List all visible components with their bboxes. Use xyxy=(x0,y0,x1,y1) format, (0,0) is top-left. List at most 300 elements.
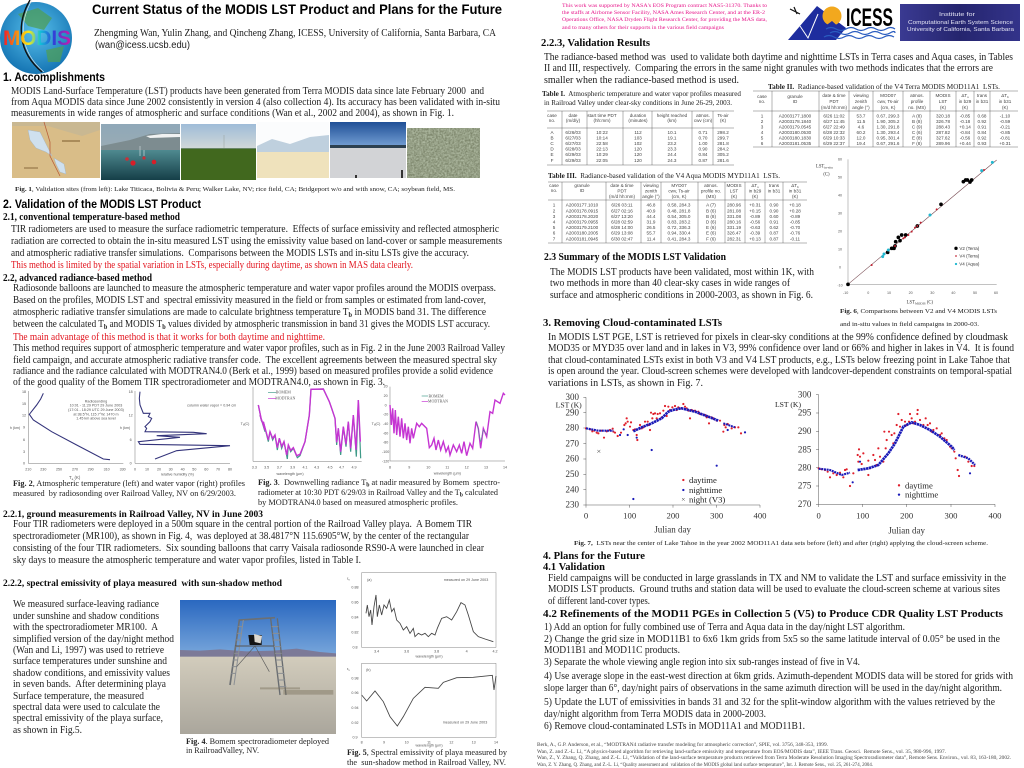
list: planned refinements: 1) Add an option for fully combined use of Terra and Aqua data in the day/night LST algorithm. xyxy=(544,622,905,633)
photo: Lake Titicaca map xyxy=(12,122,100,178)
chart: temperature profile: 250 xyxy=(56,467,62,471)
table I: atmospheric profiles: 0.70 xyxy=(699,136,708,140)
chart: temperature profile: (K) xyxy=(73,475,81,480)
chart: temperature profile: 290 xyxy=(88,467,94,471)
series: V4 Terra xyxy=(872,170,984,265)
table I: atmospheric profiles: 6/28/03 xyxy=(565,146,581,152)
chart: radiance spectrum long wave: -20 xyxy=(383,413,388,417)
text: radiance-based method: atmospheric radiative transfer simulations are made to calculate brightness temperature T xyxy=(13,307,381,318)
table II: Terra validation: (K) xyxy=(962,105,969,110)
table III: Aqua validation: 0.87 xyxy=(770,230,779,236)
text: accomplishments paragraph: measurements in wide ranges of atmospheric and surface conditions (Wan et al., 2002 and 2004), as shown in Fig. 1. xyxy=(11,108,454,119)
chart: radiance spectrum long wave: 11 xyxy=(445,465,449,469)
table III: Aqua validation: 331.19 xyxy=(727,225,741,230)
chart: water vapor profile: 12 xyxy=(129,413,133,417)
text: cloud removal xyxy=(548,332,1015,389)
chart: temperature profile: h (km) xyxy=(10,426,20,430)
caption: Fig. 4: Fig. 4. Bomem spectroradiometer deployed xyxy=(186,736,330,746)
chart: radiance spectrum long wave: -40 xyxy=(383,422,388,426)
chart: water vapor profile: relative humidity (%) xyxy=(161,473,194,477)
photo: soybean field xyxy=(407,128,480,178)
table I: atmospheric profiles: 24.3 xyxy=(668,158,677,163)
table I: atmospheric profiles: E xyxy=(550,152,554,157)
text: radiance-based method: between the calculated T xyxy=(13,319,115,330)
table III: Aqua validation: 3 xyxy=(553,214,556,219)
photo: Walker Lake buoys xyxy=(101,124,180,180)
table III: Aqua validation: -0.89 xyxy=(790,214,801,219)
note: acknowledgements: the staffs at Airborne Sensor Facility, NASA Ames Research Center, and at the ER-2 xyxy=(562,9,765,16)
table II: Terra validation: A2003179.0545 xyxy=(779,124,812,130)
figure 1: validation site photos xyxy=(12,122,480,180)
table II: Terra validation: profile xyxy=(911,99,924,104)
table III: Aqua validation: D (6) xyxy=(706,220,717,224)
photo: rice field xyxy=(181,124,256,180)
caption: Fig. 3: Fig. 3. Downwelling radiance T xyxy=(258,477,370,487)
chart: emissivity 3.4-4.2 um: (a) xyxy=(367,578,372,582)
chart: emissivity 3.4-4.2 um: s xyxy=(348,579,350,581)
series: nighttime xyxy=(819,422,975,482)
chart: emissivity 8-14 um xyxy=(347,663,498,748)
table III: Aqua validation: 40.9 xyxy=(647,208,656,214)
figure 6: scatter plot MODIS vs in-situ LST: -10 xyxy=(837,284,843,288)
table III: Aqua validation: B (6) xyxy=(706,208,716,214)
caption: Fig. 1: Fig. 1 , Validation sites (from left): Lake Titicaca, Bolivia & Peru; Walker Lake, NV; rice field, CA; Bridgeport w/o and with snow, CA; soybean field, MS. xyxy=(15,186,455,193)
table III: Aqua validation: 280.96 xyxy=(727,202,741,208)
table II: Terra validation: no. xyxy=(759,99,765,104)
table III: Aqua validation: A2003179.2100 xyxy=(566,225,599,230)
table II: Terra validation: 19.4 xyxy=(857,141,866,146)
table II: Terra validation: 2 xyxy=(761,119,764,124)
table III: Aqua validation: 6/30 02:47 xyxy=(611,236,633,242)
chart: radiance spectrum long wave: (C) xyxy=(375,422,380,426)
figure 6: scatter plot MODIS vs in-situ LST: 50 xyxy=(838,176,842,180)
figure 3: downwelling radiance spectra xyxy=(241,385,507,476)
chart: emissivity 3.4-4.2 um: 0.86 xyxy=(351,600,359,604)
text: spectral emissivity: surface temperatures under sunshine and xyxy=(13,656,168,667)
chart: before cloud screen: 270 xyxy=(566,438,579,448)
caption: Fig. 4 xyxy=(186,736,330,755)
chart: before cloud screen: 230 xyxy=(566,500,579,510)
table I: atmospheric profiles: 10:22 xyxy=(596,130,608,135)
text: summary: surface and atmospheric conditions in 2000-2003, as shown in Fig. 6. xyxy=(550,290,813,301)
table II: Terra validation: 3 xyxy=(761,124,764,130)
logo: ICESS: ICESS xyxy=(846,4,893,32)
chart: temperature profile: a xyxy=(72,477,74,481)
chart: emissivity 3.4-4.2 um: 3.6 xyxy=(404,650,409,654)
table II: Terra validation: trans xyxy=(977,93,988,98)
banner: Institute for Computational Earth System Science xyxy=(900,4,1020,41)
series: daytime xyxy=(586,404,741,440)
list: planned refinements: 6) Remove cloud-contaminated LSTs in MOD11A1 and MOD11B1. xyxy=(544,721,805,732)
text: validation results: II and III, respectively. Comparing the errors in the same night granules with two methods indicates that the errors are xyxy=(544,63,993,74)
text: radiance-based method: This method requires support of atmospheric temperature and water vapor profiles, such as in Fig. 2 in the June 2003 Railroad Valley xyxy=(13,343,506,354)
table III: Aqua validation: 0.58, 284.3 xyxy=(668,202,691,208)
text: radiance-based method: of the good quality of the Bomem TIR spectroradiometer and MODTRAN4.0, as shown in Fig. 3. xyxy=(13,377,385,388)
table III: Aqua validation: -0.63 xyxy=(750,225,761,230)
table III: Aqua validation: (cm, K) xyxy=(672,194,687,199)
table III: Aqua validation: -0.11 xyxy=(790,236,801,242)
text: summary: two methods in more than 40 clear-sky cases in wide ranges of xyxy=(550,278,791,289)
table II: Terra validation: A2003177.1800 xyxy=(779,114,812,118)
table II: Terra validation: C (9) xyxy=(912,124,923,130)
text: plans validation xyxy=(548,573,1006,607)
figure 6: scatter plot MODIS vs in-situ LST: LST xyxy=(907,301,915,306)
chart: emissivity 3.4-4.2 um: 4.2 xyxy=(492,650,498,654)
table II: Terra validation: -0.59 xyxy=(1000,119,1011,124)
chart: emissivity 8-14 um: measured on 29 June 2003 xyxy=(443,721,487,725)
table I: atmospheric profiles: 23.3 xyxy=(668,146,677,152)
chart: radiance spectrum short wave: 3.7 xyxy=(277,465,282,469)
legend: V2 (Terra) xyxy=(959,246,980,251)
references: Wan, Z. Y. Zhang, Q. Zhang, and Z.-L. Li, “Quality assessment and validation of the MODIS global land surface temperature”, Int. J. Remote Sens., vol. 25, 261-274, 2004. xyxy=(537,762,873,768)
table III: Aqua validation: (MS) xyxy=(706,194,716,199)
chart: emissivity 8-14 um: 0.96 xyxy=(351,691,359,695)
table II: Terra validation: s xyxy=(967,95,969,99)
table III: Aqua validation: 0.90 xyxy=(770,202,779,208)
table III: Aqua validation: in b29 xyxy=(749,188,762,194)
table II: Terra validation: 0.93 xyxy=(978,141,987,146)
chart: emissivity 3.4-4.2 um: wavelength (µm) xyxy=(415,654,443,658)
table II: Terra validation: C (6) xyxy=(912,130,923,135)
figure 6: scatter plot MODIS vs in-situ LST: 20 xyxy=(909,291,913,295)
chart: temperature profile: 10:01 - 11:29 PDT 29 June 2003 xyxy=(70,404,122,408)
table II: Terra validation: B (8) xyxy=(912,119,922,124)
table III: Aqua validation: -0.76 xyxy=(790,230,801,236)
chart: emissivity 3.4-4.2 um: 4 xyxy=(466,650,468,654)
table II: Terra validation: zenith xyxy=(855,99,868,104)
series: nighttime xyxy=(586,408,745,499)
table III: Aqua validation: +0.31 xyxy=(749,202,761,208)
caption: Fig. 5 xyxy=(347,747,508,767)
table II: Terra validation: A2003178.1840 xyxy=(779,119,812,124)
table II: Terra validation: -0.18 xyxy=(960,119,971,124)
text: spectral emissivity: spectral data were used to calculate the xyxy=(13,702,160,713)
legend: before xyxy=(682,475,725,505)
chart: radiance spectrum long wave: -120 xyxy=(382,459,389,463)
chart: before cloud screen: 260 xyxy=(566,454,579,464)
figure 6: scatter plot MODIS vs in-situ LST: in-situ xyxy=(824,165,833,169)
table III: Aqua validation: 4 xyxy=(553,220,556,224)
legend: before: daytime xyxy=(689,475,717,485)
chart: emissivity 8-14 um: ε xyxy=(347,667,348,671)
table I: atmospheric profiles: no. xyxy=(549,118,555,123)
text: radiance-based method: b xyxy=(104,323,107,331)
table III: Aqua validation: +0.28 xyxy=(789,208,801,214)
table I: atmospheric profiles: 10.1 xyxy=(668,130,677,135)
text: radiance-based method: Based on the profiles, MODIS LST and spectral emissivity measured in the field or from samples or estimated from land-cover, xyxy=(13,295,486,306)
list: planned refinements: 2) Change the grid size in MOD11B1 to 6x6 1km grids from 5x5 so the same latitude interval of 0.05° be used in the xyxy=(544,634,1000,645)
chart: radiance spectrum short wave: (C) xyxy=(244,422,249,426)
chart: before cloud screen: 400 xyxy=(754,511,766,521)
table II: Terra validation: in b31 xyxy=(999,99,1012,104)
table III: Aqua validation: in b31 xyxy=(789,188,802,194)
table II: Terra validation: 4 xyxy=(761,130,764,135)
text: radiance-based method: b xyxy=(349,311,352,319)
table II: Terra validation: 6/29 10:33 xyxy=(823,136,845,140)
table III: Aqua validation: E (6) xyxy=(706,225,716,230)
table I: atmospheric profiles: 6/27/03 xyxy=(565,136,581,140)
chart: temperature profile: at 38.5°N, 115.7°W, 1470 m xyxy=(73,412,119,416)
table III: Aqua validation: (K) xyxy=(752,194,759,199)
table II: Terra validation: 11.5 xyxy=(857,119,866,124)
note: acknowledgements: Operations Office, NASA Dryden Flight Research Center, for providing the MAS data, xyxy=(562,16,768,23)
chart: radiance spectrum short wave: MODTRAN xyxy=(275,396,296,401)
table II: Terra validation: 60.2 xyxy=(857,130,866,135)
table III: Aqua validation: 326.47 xyxy=(727,230,741,236)
text: conventional method: This method is limited by the spatial variation in LSTs, especially during daytime, as shown in MAS data clearly. xyxy=(11,260,413,271)
table III: Aqua validation: 31.9 xyxy=(647,220,656,224)
chart: before cloud screen: 300 xyxy=(566,392,579,402)
table II: Terra validation: 0.84 xyxy=(978,130,987,135)
table II: Terra validation: +0.44 xyxy=(959,141,971,146)
table II: Terra validation: in b31 xyxy=(976,99,989,104)
caption: Fig. 3 xyxy=(258,477,500,507)
table II: Terra validation xyxy=(753,91,1018,147)
table III: Aqua validation: 0.94, 330.4 xyxy=(668,230,691,236)
chart: after cloud screen: 280 xyxy=(798,462,812,472)
table II: Terra validation: cwv, Ts-air xyxy=(877,99,899,104)
table I: atmospheric profiles: start time PDT xyxy=(587,113,617,118)
text: ground measurements: Four TIR radiometers were deployed in a 500m square in the central portion of the Railroad Valley playa. A Bomem TIR xyxy=(13,519,472,530)
table I: atmospheric profiles: 102 xyxy=(634,141,642,146)
chart: radiance spectrum short wave: 3.5 xyxy=(264,465,269,469)
table II: Terra validation: 289.96 xyxy=(936,141,950,146)
text: radiance-based method: Radiosonde balloons are launched to measure the atmospheric temperature and water vapor profiles around the MODIS overpass. xyxy=(13,283,496,294)
chart: radiance spectrum long wave: 0 xyxy=(385,403,387,407)
table I: atmospheric profiles: 19.1 xyxy=(668,136,677,140)
table I: atmospheric profiles: (K) xyxy=(720,118,727,123)
table II: Terra validation: (cm, K) xyxy=(881,105,896,110)
table I: atmospheric profiles: 22:13 xyxy=(596,146,608,152)
text: radiance-based method: field campaign, and accurate atmospheric radiative transfer code. The excellent agreements between the measured spectral sky xyxy=(13,355,498,366)
list: planned refinements: 5) Update the LUT of emissivities in bands 31 and 32 for the split-window algorithm with the values retrieved by the xyxy=(544,697,995,708)
table II: Terra validation: 53.7 xyxy=(857,114,866,118)
figure 6: scatter plot MODIS vs in-situ LST: 10 xyxy=(887,291,891,295)
caption: Fig. 2 xyxy=(13,478,246,498)
table II: Terra validation: (K) xyxy=(1002,105,1009,110)
table I: atmospheric profiles: (hh:mm) xyxy=(593,118,611,123)
table II: Terra validation: viewing xyxy=(853,93,869,98)
table III: Aqua validation: s xyxy=(757,185,759,189)
table I: atmospheric profiles: cwv (cm) xyxy=(694,118,713,123)
caption: Fig. 6 xyxy=(840,308,998,328)
heading: 2.1: 2.1, conventional temperature-based method xyxy=(3,212,180,223)
chart: temperature profile: T xyxy=(69,475,72,480)
table III: Aqua validation: 280.16 xyxy=(727,220,741,224)
legend: after: daytime xyxy=(905,480,933,490)
text: radiance-based method: radiance and the radiance calculated with MODTRAN4.0 (Berk et al., 1999) based on measured profiles provide a solid evidence xyxy=(13,366,493,377)
chart: radiance spectrum short wave: b xyxy=(243,423,245,427)
chart: radiance spectrum long wave: 9 xyxy=(408,465,410,469)
text: ground measurements: sky days to measure the atmospheric temperature and water vapor profiles, listed in Table I. xyxy=(13,555,361,566)
table III: Aqua validation: zenith xyxy=(645,188,658,194)
table II: Terra validation: in b29 xyxy=(959,99,972,104)
table I: atmospheric profiles: 22:58 xyxy=(596,141,608,146)
table III: Aqua validation: A2003180.2005 xyxy=(566,230,599,236)
table III: Aqua validation: 0.83, 283.2 xyxy=(668,220,691,224)
chart: temperature profile: 9 xyxy=(23,426,25,430)
table II: Terra validation: 1.30, 293.4 xyxy=(876,130,900,135)
authors xyxy=(94,28,497,51)
authors: (wan@icess.ucsb.edu) xyxy=(95,40,190,51)
table III: Aqua validation: 0.60 xyxy=(770,214,779,219)
table III: Aqua validation: +0.15 xyxy=(749,208,761,214)
chart: radiance spectrum long wave: T xyxy=(372,422,374,426)
table III: Aqua validation: atmos. xyxy=(704,183,718,188)
table I: atmospheric profiles: 284.2 xyxy=(717,146,729,152)
table I: atmospheric profiles: 120 xyxy=(634,158,642,163)
table III: Aqua validation: A2003177.1010 xyxy=(566,202,599,208)
chart: radiance spectrum short wave: 3.9 xyxy=(290,465,295,469)
note: acknowledgements xyxy=(562,3,768,31)
chart: water vapor profile: 30 xyxy=(169,467,173,471)
text: spectral emissivity: spectral emissivity of the playa surface, xyxy=(13,713,163,724)
chart: temperature profile: 3 xyxy=(23,450,25,454)
table III: Aqua validation: ΔT xyxy=(791,183,797,188)
table III: Aqua validation: no. xyxy=(551,188,557,193)
table I: atmospheric profiles xyxy=(547,111,734,165)
heading: 4.1 Validation: 4.1 Validation xyxy=(543,562,605,573)
chart: emissivity 3.4-4.2 um: 0.88 xyxy=(351,586,359,590)
table III: Aqua validation: (K) xyxy=(792,194,799,199)
text: radiance-based method: The main advantage of this method is that it works for both daytime and nighttime. xyxy=(13,332,325,343)
text: radiance-based method: and MODIS T xyxy=(107,319,163,330)
table I: atmospheric profiles: 24.4 xyxy=(668,152,677,157)
text: spectral emissivity: (Wan and Li, 1997) was used to retrieve xyxy=(13,645,164,656)
chart: radiance spectrum long wave: MODTRAN xyxy=(428,399,448,404)
chart: radiance spectrum short wave: wavelength (µm) xyxy=(276,472,304,476)
text: spectral emissivity: as shown in Fig.5. xyxy=(13,725,82,736)
table III: Aqua validation: B (8) xyxy=(706,214,716,219)
chart: radiance spectrum long wave xyxy=(372,385,507,476)
text: conventional method xyxy=(11,224,502,271)
table I: atmospheric profiles: 22:05 xyxy=(596,158,608,163)
table I: atmospheric profiles: 6/26/03 xyxy=(565,130,581,135)
caption: Fig. 3: b xyxy=(460,492,464,498)
chart: radiance spectrum long wave: 20 xyxy=(384,385,388,389)
table III: Aqua validation: profile no. xyxy=(701,188,721,194)
chart: after cloud screen: LST (K) xyxy=(775,400,801,409)
chart: water vapor profile: h (km) xyxy=(120,426,130,430)
table II: Terra validation: LST xyxy=(939,99,947,104)
table II: Terra validation: 0.67, 299.3 xyxy=(876,114,900,118)
table III: Aqua validation: F (6) xyxy=(706,236,716,242)
chart: radiance spectrum short wave xyxy=(241,387,362,476)
table III: Aqua validation: 0.54, 305.0 xyxy=(668,214,691,219)
table II: Terra validation: 288.43 xyxy=(936,124,950,130)
caption: Fig. 3: by MODTRAN4.0 based on measured atmospheric profiles. xyxy=(258,497,458,507)
chart: radiance spectrum long wave: -60 xyxy=(383,431,388,435)
table III: Aqua validation: 0.90 xyxy=(770,208,779,214)
chart: emissivity 3.4-4.2 um: 0.82 xyxy=(351,630,359,634)
chart: temperature profile: 15 xyxy=(22,402,26,406)
chart: after cloud screen: 400 xyxy=(989,511,1001,521)
text: accomplishments paragraph: from Aqua MODIS data since June 2002 consistently in version 4 (also collection 4). Its accuracy has been validated with in-situ xyxy=(11,97,500,108)
text: radiance-based method: in MODIS band 31. The difference xyxy=(352,307,486,318)
table III: Aqua validation: A2003178.0915 xyxy=(566,208,599,214)
figure 6: scatter plot MODIS vs in-situ LST: 40 xyxy=(838,194,842,198)
chart: water vapor profile: 0 xyxy=(130,461,132,465)
title: Current Status of the MODIS LST Product and Plans for the Future xyxy=(92,2,502,17)
chart: emissivity 8-14 um: 0.9 xyxy=(352,736,358,740)
table III: Aqua validation: 281.08 xyxy=(727,208,741,214)
chart: before cloud screen: 240 xyxy=(566,484,579,494)
banner: Institute for Computational Earth System Science: University of California, Santa Barbara xyxy=(907,27,1015,33)
caption: Fig. 3: b xyxy=(366,482,370,488)
table I: atmospheric profiles: 120 xyxy=(634,152,642,157)
chart: after cloud screen: 295 xyxy=(798,408,812,418)
table III: Aqua validation: 6/26 03:11 xyxy=(611,202,633,208)
chart: temperature profile: Radiosonding xyxy=(85,399,107,403)
chart: radiance spectrum short wave: 4.1 xyxy=(302,465,308,469)
note: acknowledgements: This work was supported by NASA's EOS Program contract NAS5-31370. Thanks to xyxy=(562,3,767,9)
heading: 2.3 Summary: 2.3 Summary of the MODIS LST Validation xyxy=(544,252,726,263)
chart: emissivity 3.4-4.2 um: 3.8 xyxy=(434,650,439,654)
chart: water vapor profile: 20 xyxy=(157,467,161,471)
chart: water vapor profile: column water vapor = 0.94 cm xyxy=(187,403,236,407)
table II: Terra validation: 5 xyxy=(761,136,764,140)
chart: emissivity 8-14 um: 9 xyxy=(383,740,385,744)
text: ground measurements: spectroradiometer (MR100), as shown in Fig. 4, was deployed at 38.4817°N 115.6905°W, by the center of the rectangular xyxy=(13,531,470,542)
table III: Aqua validation: LST xyxy=(730,188,738,194)
figure 6: scatter plot MODIS vs in-situ LST: 30 xyxy=(930,291,934,295)
banner: Institute for Computational Earth System Science: Computational Earth System Science xyxy=(908,20,1013,26)
table II: Terra validation: 0.68 xyxy=(978,114,987,118)
text: cloud removal: variations in LSTs, as shown in Fig. 7. xyxy=(548,378,703,389)
chart: before cloud screen: 200 xyxy=(667,511,679,521)
table I: atmospheric profiles: 10:29 xyxy=(596,152,608,157)
table II: Terra validation: ID xyxy=(793,99,798,104)
chart: radiance spectrum long wave: 12 xyxy=(465,465,469,469)
table I: atmospheric profiles: 0.87 xyxy=(699,158,708,163)
table III: Aqua validation: PDT xyxy=(617,188,627,194)
note: acknowledgements: and to many others for their supports in the various field campaigns xyxy=(562,24,724,31)
table III: Aqua validation: case xyxy=(549,183,559,188)
text: spectral emissivity xyxy=(13,599,175,736)
table III: Aqua validation: 6 xyxy=(553,230,556,236)
chart: emissivity 3.4-4.2 um: measured on 29 June 2003 xyxy=(444,578,488,582)
table III: Aqua validation: 11.4 xyxy=(647,236,656,242)
table III: Aqua validation: 0.41, 284.3 xyxy=(668,236,691,242)
table III: Aqua validation: MYD07 xyxy=(671,183,687,188)
table I: atmospheric profiles: 298.2 xyxy=(717,130,729,135)
figure 6: scatter plot MODIS vs in-situ LST: 60 xyxy=(994,291,998,295)
table III: Aqua validation: -0.56 xyxy=(750,220,761,224)
chart: emissivity 8-14 um: 13 xyxy=(472,740,476,744)
table II: Terra validation: -0.85 xyxy=(1000,130,1011,135)
heading: 3. Removing Cloud-contaminated LSTs: 3. Removing Cloud-contaminated LSTs xyxy=(543,317,723,329)
figure 6: scatter plot MODIS vs in-situ LST: LST xyxy=(816,164,824,169)
table I: atmospheric profiles: 6/29/03 xyxy=(565,158,581,163)
text: accomplishments paragraph: MODIS Land-Surface Temperature (LST) products have been generated from Terra MODIS data since late February 2000 and xyxy=(11,86,485,97)
chart: emissivity 8-14 um: 12 xyxy=(449,740,453,744)
heading: 1. Accomplishments: 1. Accomplishments xyxy=(3,72,105,84)
chart: after cloud screen: Julian day xyxy=(888,526,926,536)
caption: Fig. 2: Fig. 2, Atmospheric temperature (left) and water vapor (right) profiles xyxy=(13,478,246,488)
heading: 2.2: 2.2, advanced radiance-based method xyxy=(3,273,152,284)
figure 6: scatter plot MODIS vs in-situ LST: 10 xyxy=(838,248,842,252)
table I: atmospheric profiles: 305.2 xyxy=(717,152,729,157)
table III: Aqua validation xyxy=(548,182,807,243)
chart: emissivity 3.4-4.2 um xyxy=(347,573,498,658)
table III: Aqua validation: 331.08 xyxy=(727,214,741,219)
chart: temperature profile: 12 xyxy=(22,413,26,417)
legend: before: night (V3) xyxy=(689,495,725,505)
table III: Aqua validation: 44.4 xyxy=(647,214,656,219)
chart: water vapor profile: 50 xyxy=(192,467,196,471)
chart: emissivity 8-14 um: 14 xyxy=(494,740,498,744)
table II: Terra validation: 1.30, 291.8 xyxy=(876,124,900,130)
